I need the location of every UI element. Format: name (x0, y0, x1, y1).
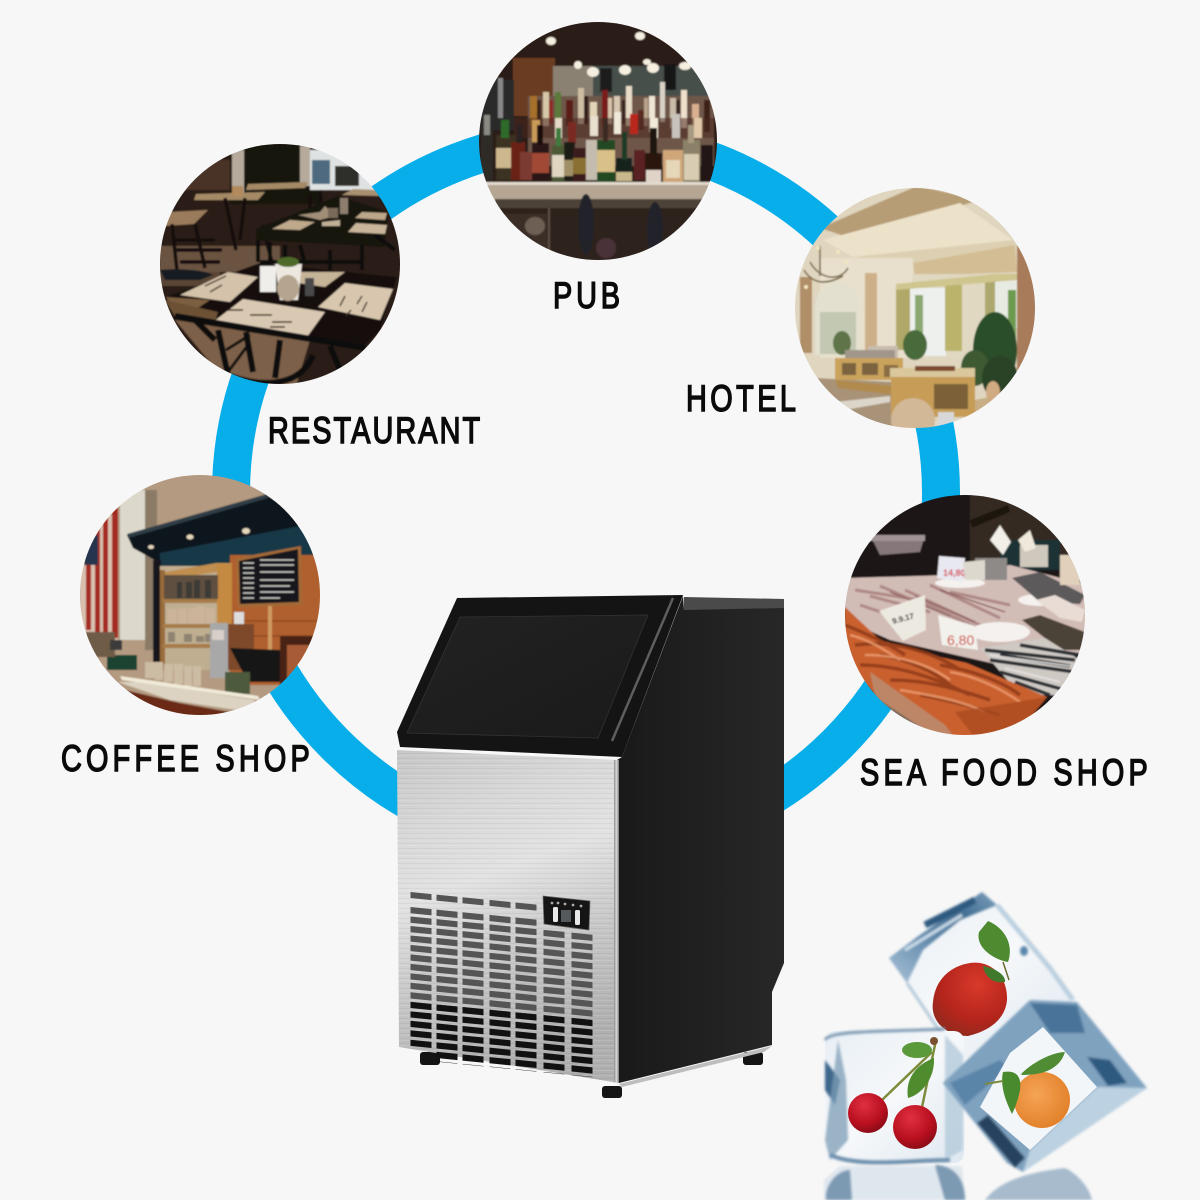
second dark table (256, 196, 389, 247)
orange wood wall (230, 555, 325, 685)
control panel (543, 896, 590, 930)
wooden shelf (158, 564, 218, 670)
dark soffit and teal wall (127, 495, 312, 563)
track lights (148, 528, 250, 549)
foreground table (166, 263, 397, 347)
shrimp (845, 607, 1047, 740)
label: pub: PUB (553, 276, 620, 317)
label: sea food shop: SEA FOOD SHOP (860, 753, 1148, 794)
floor and tables (818, 378, 892, 426)
price tags (879, 525, 1036, 650)
machine steel front (397, 750, 619, 1083)
top ice cube (889, 892, 1073, 1060)
ice cubes with fruit (824, 892, 1147, 1200)
apple (933, 921, 1010, 1036)
cherries (848, 1037, 938, 1149)
price tags: 6,80 (947, 632, 974, 648)
label: coffee shop: COFFEE SHOP (61, 739, 310, 780)
arched window (815, 293, 820, 355)
orange (985, 1052, 1070, 1128)
ice machine (397, 595, 784, 1098)
glass tray (870, 672, 955, 738)
photo: hotel (795, 188, 1035, 428)
machine side panel (617, 596, 784, 1083)
plant (903, 330, 927, 360)
machine feet (420, 1052, 763, 1098)
dark fish and tags on right (1012, 572, 1085, 604)
photo: sea food shop (843, 490, 1088, 740)
label: restaurant: RESTAURANT (268, 411, 480, 452)
steel right edge (614, 760, 619, 1083)
label: hotel: HOTEL (686, 379, 796, 420)
chalkboard (236, 546, 302, 607)
curtains (896, 285, 910, 350)
right column (1016, 245, 1035, 370)
bar counter (488, 184, 708, 202)
price tags: 9.9.17 (891, 611, 916, 626)
reflection: right cube (985, 1168, 1092, 1200)
photo: coffee shop (78, 474, 325, 722)
photo: pub (478, 20, 718, 262)
steel brushing (397, 750, 619, 1083)
machine base shadow edge (619, 1046, 772, 1087)
chandelier (804, 246, 848, 282)
pub lights (546, 32, 691, 77)
reflection detail (826, 1165, 965, 1200)
back bottles (514, 82, 714, 166)
right ice cube (943, 1000, 1147, 1172)
coffee machine (210, 623, 228, 678)
price tags: 14,80 (943, 568, 966, 578)
flag (80, 515, 118, 645)
front bottles (481, 115, 713, 185)
photo: restaurant (155, 140, 405, 390)
ventilation slots (421, 893, 582, 1076)
machine top strip (684, 597, 784, 611)
upper tables (194, 192, 265, 200)
foreground chair and floor (175, 320, 310, 386)
apple leaves (978, 921, 1010, 962)
table centrepiece (260, 266, 276, 292)
hopper panel (407, 615, 648, 738)
left ice cube (825, 1029, 964, 1163)
machine hopper lid (397, 595, 683, 757)
fish bed (845, 565, 1088, 665)
hopper handle highlight (612, 598, 673, 741)
blue connecting ring (231, 138, 941, 848)
till (230, 648, 283, 682)
reflection: left cube (824, 1166, 965, 1200)
counter items and counter (145, 662, 201, 686)
